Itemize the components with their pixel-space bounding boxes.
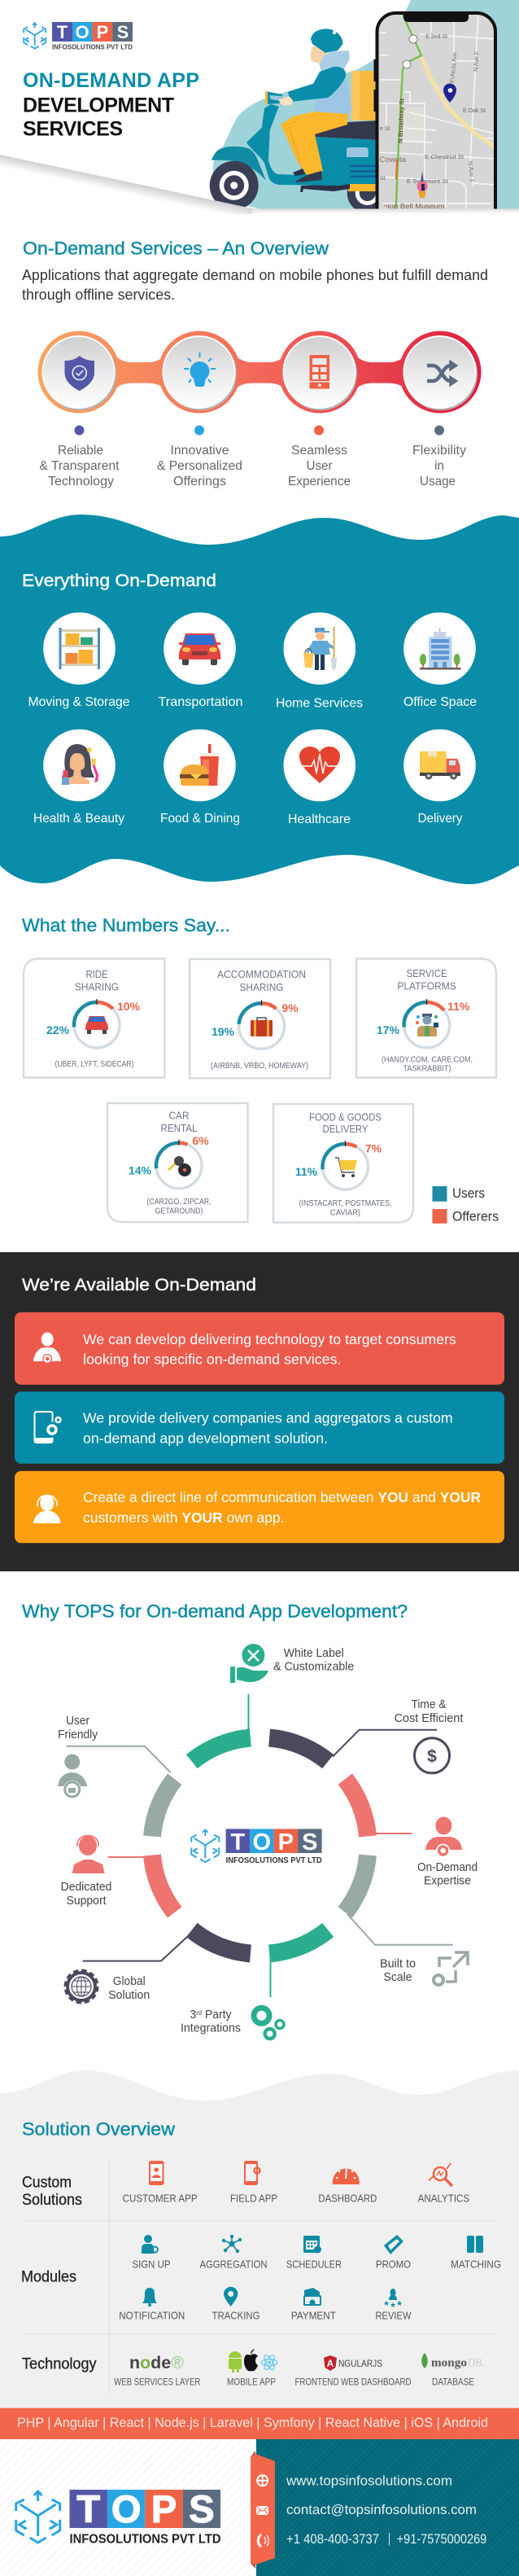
row: custom solutions: FIELD APP — [230, 2192, 277, 2204]
center logo: P — [278, 1829, 294, 1855]
benefit labels: Usage — [420, 475, 456, 488]
center logo: INFOSOLUTIONS PVT LTD — [226, 1856, 322, 1865]
box: communication — [15, 1471, 504, 1543]
center logo: T — [230, 1829, 245, 1855]
legend — [433, 1185, 499, 1224]
item: third party integrations: rd — [196, 2009, 202, 2017]
row: modules: SCHEDULER — [286, 2258, 342, 2271]
card: ride sharing: 22% — [46, 1023, 70, 1036]
item: white label: White Label — [284, 1647, 344, 1660]
item: global solution: Solution — [108, 1989, 150, 2002]
icon: field app — [244, 2161, 260, 2185]
icon: service person — [416, 1014, 438, 1036]
card: food and goods delivery — [273, 1104, 413, 1223]
category labels: Home Services — [276, 697, 363, 710]
icon: globe — [257, 2475, 268, 2486]
item: white label: & Customizable — [273, 1661, 354, 1674]
item: time and cost — [395, 1698, 463, 1773]
benefit labels: Flexibility — [412, 444, 466, 458]
item: time and cost: $ — [427, 1747, 437, 1766]
icon: headset agent — [33, 1495, 60, 1523]
card: service platforms — [356, 959, 496, 1078]
card: service platforms: 11% — [447, 1000, 470, 1013]
footer contact panel — [251, 2439, 519, 2576]
box: technology — [15, 1312, 504, 1385]
technology strip — [0, 2408, 519, 2439]
card: food and goods delivery: CAVIAR) — [330, 1207, 360, 1217]
title: SERVICES — [23, 117, 123, 140]
item: on-demand expertise — [417, 1817, 478, 1887]
logo: mongodb: DB. — [468, 2357, 485, 2370]
row: custom solutions: Solutions — [22, 2192, 82, 2209]
icon: delivery truck — [420, 751, 460, 780]
logo: T — [57, 22, 68, 42]
footer logo: T — [76, 2487, 100, 2530]
category labels: Moving & Storage — [28, 695, 130, 709]
phone with map: N Ave F — [473, 51, 480, 72]
phone with map: N Ave J — [467, 161, 474, 182]
row: custom solutions — [22, 2161, 469, 2209]
benefit labels: Reliable — [58, 444, 103, 458]
item: built to scale: Scale — [384, 1971, 412, 1984]
phone with map: Coweta — [380, 156, 407, 164]
category labels: Delivery — [418, 812, 462, 826]
item: time and cost: Time & — [412, 1698, 447, 1711]
footer contact panel: +1 408-400-3737 — [286, 2531, 379, 2547]
footer logo: INFOSOLUTIONS PVT LTD — [70, 2532, 221, 2546]
card: service platforms: 17% — [377, 1023, 400, 1036]
card: food and goods delivery: DELIVERY — [322, 1124, 369, 1135]
row: modules — [21, 2235, 501, 2321]
center logo — [191, 1829, 322, 1865]
card: ride sharing: RIDE — [86, 969, 107, 980]
icon: food and dining — [180, 744, 220, 786]
row: custom solutions: CUSTOMER APP — [123, 2192, 198, 2204]
overview paragraph: Applications that aggregate demand on mobile phones but fulfill demand — [22, 267, 488, 283]
row: modules: PAYMENT — [291, 2309, 336, 2321]
item: user friendly: Friendly — [58, 1728, 98, 1741]
panel: everything on-demand — [0, 515, 519, 884]
logo: angularjs — [324, 2355, 382, 2371]
card: food and goods delivery: 7% — [365, 1142, 382, 1155]
hero teal background — [213, 0, 519, 209]
row: custom solutions: DASHBOARD — [318, 2192, 377, 2204]
footer logo: P — [151, 2487, 177, 2530]
row: modules: PROMO — [376, 2258, 411, 2271]
phone with map — [374, 11, 497, 208]
item: global solution — [68, 1973, 150, 2002]
footer logo: O — [111, 2487, 141, 2530]
logo: mongodb — [421, 2353, 485, 2370]
logos: android apple react — [229, 2349, 277, 2372]
icon: healthcare heart — [299, 747, 340, 783]
icon: analytics — [429, 2163, 452, 2186]
logo: node: node® — [129, 2354, 185, 2372]
benefit labels: Technology — [48, 475, 114, 488]
icon: car — [179, 633, 220, 665]
category labels: Health & Beauty — [33, 812, 124, 826]
item: built to scale: Built to — [380, 1957, 416, 1970]
card: ride sharing: SHARING — [75, 982, 119, 993]
heading: We’re Available On-Demand — [22, 1276, 256, 1295]
icon: dashboard gauge — [333, 2166, 360, 2184]
item: third party integrations: 3 — [190, 2009, 197, 2022]
icon: person with gear — [33, 1332, 61, 1364]
slanted white cut with shadow — [0, 155, 252, 214]
icon: car — [85, 1016, 108, 1034]
logo: S — [117, 22, 129, 42]
ring diagram — [58, 1644, 478, 2039]
row: technology: WEB SERVICES LAYER — [114, 2377, 200, 2387]
heading: Solution Overview — [22, 2118, 175, 2139]
logo: mongodb: mongo — [431, 2357, 467, 2370]
item: on-demand expertise: Expertise — [424, 1874, 471, 1887]
row: modules: Modules — [21, 2269, 76, 2286]
icons: modules: ★ — [396, 2299, 403, 2307]
phone with map: E 2nd St — [425, 34, 447, 40]
row: modules: REVIEW — [376, 2309, 412, 2321]
center logo: S — [302, 1829, 317, 1855]
phone with map: E Chestnut St — [425, 155, 464, 160]
icons: modules: ★ — [383, 2299, 390, 2307]
benefit dots — [75, 425, 444, 435]
footer contact panel: www.topsinfosolutions.com — [286, 2473, 452, 2488]
why tops heading: Why TOPS for On-demand App Development? — [22, 1601, 408, 1622]
title — [23, 69, 199, 140]
card: car rental: 6% — [192, 1134, 209, 1147]
benefit labels: Experience — [288, 475, 351, 488]
icon: shuffle — [427, 361, 457, 386]
white icon circles — [43, 612, 476, 801]
benefit labels: Innovative — [171, 444, 229, 458]
card: car rental: GETAROUND) — [155, 1207, 203, 1216]
row: modules: NOTIFICATION — [119, 2309, 185, 2321]
footer logo — [16, 2487, 221, 2546]
item: user friendly — [58, 1715, 98, 1798]
legend: Offerers — [452, 1208, 499, 1224]
phone with map: E Oak St — [463, 108, 486, 114]
panel: available on-demand — [0, 1252, 519, 1571]
heading: Everything On-Demand — [22, 572, 216, 590]
card: accommodation sharing: SHARING — [239, 982, 283, 993]
legend: Users — [452, 1185, 485, 1201]
numbers heading: What the Numbers Say... — [22, 915, 230, 935]
benefit labels: in — [434, 459, 444, 473]
category labels: Transportation — [158, 695, 242, 709]
icon: customer app — [149, 2161, 164, 2185]
card: accommodation sharing: (AIRBNB, VRBO, HOMEWAY) — [211, 1061, 308, 1071]
category labels: Office Space — [403, 695, 477, 709]
icon: light bulb — [184, 353, 216, 387]
title: ON-DEMAND APP — [23, 69, 199, 92]
box: technology: looking for specific on-demand services. — [83, 1352, 342, 1368]
icon: app panel — [309, 355, 329, 389]
phone with map: ssion Bell Museum — [380, 203, 445, 210]
card: accommodation sharing — [190, 959, 330, 1078]
card: service platforms: TASKRABBIT) — [403, 1063, 451, 1073]
logo: angularjs: A — [327, 2358, 334, 2369]
footer logo: S — [189, 2487, 215, 2530]
row: technology: FRONTEND WEB DASHBOARD — [294, 2377, 412, 2387]
logo: P — [97, 22, 108, 42]
item: dedicated support: Support — [67, 1895, 106, 1908]
item: third party integrations: Integrations — [181, 2022, 241, 2035]
card: accommodation sharing: ACCOMMODATION — [217, 969, 306, 980]
center logo: O — [253, 1829, 271, 1855]
logo: O — [75, 22, 89, 42]
icon: storage shelves — [59, 628, 100, 669]
benefit labels: & Transparent — [39, 459, 120, 473]
item: third party integrations: Party — [202, 2009, 232, 2022]
box: communication: Create a direct line of communication between YOU and YOUR — [83, 1489, 481, 1505]
phone with map: Eufaula Ave — [450, 52, 458, 83]
icon: health and beauty — [62, 744, 98, 785]
icon: keys — [168, 1156, 191, 1176]
benefit labels — [39, 444, 466, 488]
footer contact panel: | — [388, 2530, 390, 2546]
phone with map: e St — [380, 126, 390, 132]
row: modules: MATCHING — [451, 2258, 501, 2271]
row: technology — [22, 2349, 485, 2387]
ring segments — [152, 1737, 368, 1954]
card: ride sharing — [24, 959, 164, 1078]
icon: phone with gears — [34, 1412, 60, 1443]
card: service platforms: SERVICE — [407, 968, 447, 979]
row: custom solutions: Custom — [22, 2175, 72, 2192]
phone with map: St — [380, 176, 386, 182]
item: dedicated support: Dedicated — [61, 1881, 111, 1894]
icon: shield — [65, 356, 94, 391]
card: ride sharing: (UBER, LYFT, SIDECAR) — [55, 1059, 133, 1069]
title: DEVELOPMENT — [23, 94, 174, 117]
category labels: Food & Dining — [160, 812, 240, 826]
item: on-demand expertise: On-Demand — [417, 1861, 478, 1874]
item: global solution: Global — [113, 1975, 146, 1988]
card: food and goods delivery: FOOD & GOODS — [309, 1111, 382, 1123]
row: technology: DATABASE — [432, 2377, 474, 2387]
item: user friendly: User — [66, 1715, 89, 1728]
icon: home services worker — [303, 627, 337, 671]
card: car rental: CAR — [169, 1110, 189, 1121]
benefit labels: Offerings — [173, 475, 226, 488]
scooter and rider — [210, 28, 388, 213]
row: modules: SIGN UP — [132, 2258, 171, 2271]
benefit labels: Seamless — [291, 444, 347, 458]
row: technology: Technology — [22, 2355, 97, 2372]
box: solution — [15, 1391, 504, 1464]
icon: envelope — [256, 2506, 268, 2515]
technology strip: PHP | Angular | React | Node.js | Laravel | Symfony | React Native | iOS | Android — [17, 2415, 488, 2430]
icon: suitcase — [251, 1018, 273, 1036]
card: service platforms: (HANDY.COM, CARE.COM, — [382, 1055, 473, 1065]
item: built to scale — [380, 1952, 468, 1985]
overview paragraph: through offline services. — [22, 287, 175, 303]
phone with map: N Broadway St — [397, 98, 405, 143]
benefit labels: User — [306, 459, 332, 473]
footer contact panel: contact@topsinfosolutions.com — [286, 2502, 477, 2517]
icons: modules — [142, 2235, 483, 2309]
icon: phone — [258, 2534, 268, 2547]
icon: cart — [335, 1158, 357, 1177]
card: food and goods delivery: (INSTACART, POSTMATES, — [299, 1198, 392, 1208]
card: food and goods delivery: 11% — [295, 1165, 318, 1178]
box: solution: We provide delivery companies and aggregators a custom — [83, 1410, 453, 1426]
card: car rental — [107, 1103, 247, 1222]
benefit labels: & Personalized — [157, 459, 242, 473]
overview heading: On-Demand Services – An Overview — [23, 238, 329, 259]
card: car rental: 14% — [129, 1164, 152, 1177]
logo — [24, 22, 133, 50]
overview benefit chain — [37, 331, 482, 414]
row: custom solutions: ANALYTICS — [418, 2192, 469, 2204]
row: modules: AGGREGATION — [200, 2258, 267, 2271]
box: solution: on-demand app development solution. — [83, 1430, 328, 1446]
card: car rental: RENTAL — [161, 1123, 198, 1134]
panel: solution overview — [0, 2070, 519, 2408]
card: accommodation sharing: 9% — [281, 1001, 299, 1014]
phone with map: E Sycamore St — [407, 179, 448, 185]
logo: INFOSOLUTIONS PVT LTD — [52, 44, 133, 50]
box: communication: customers with YOUR own app. — [83, 1509, 285, 1526]
icon: office building — [420, 628, 460, 669]
logo: angularjs: NGULARJS — [338, 2358, 382, 2369]
card: car rental: (CAR2GO, ZIPCAR, — [146, 1197, 212, 1207]
item: third party integrations — [181, 2008, 284, 2039]
category labels — [28, 695, 477, 826]
leader lines — [66, 1694, 453, 1997]
icons: modules: ★ — [390, 2301, 396, 2309]
row: modules: TRACKING — [212, 2309, 260, 2321]
category labels: Healthcare — [288, 813, 351, 826]
card: accommodation sharing: 19% — [212, 1025, 235, 1038]
item: white label — [230, 1644, 354, 1683]
item: dedicated support — [61, 1835, 111, 1908]
card: ride sharing: 10% — [117, 1000, 141, 1013]
box: technology: We can develop delivering technology to target consumers — [83, 1331, 456, 1347]
overview paragraph — [22, 267, 488, 303]
footer contact panel: +91-7575000269 — [397, 2531, 486, 2547]
card: service platforms: PLATFORMS — [397, 981, 456, 992]
row: technology: MOBILE APP — [227, 2377, 276, 2387]
footer left — [0, 2439, 256, 2576]
hero panel — [0, 0, 519, 233]
item: time and cost: Cost Efficient — [395, 1712, 463, 1725]
